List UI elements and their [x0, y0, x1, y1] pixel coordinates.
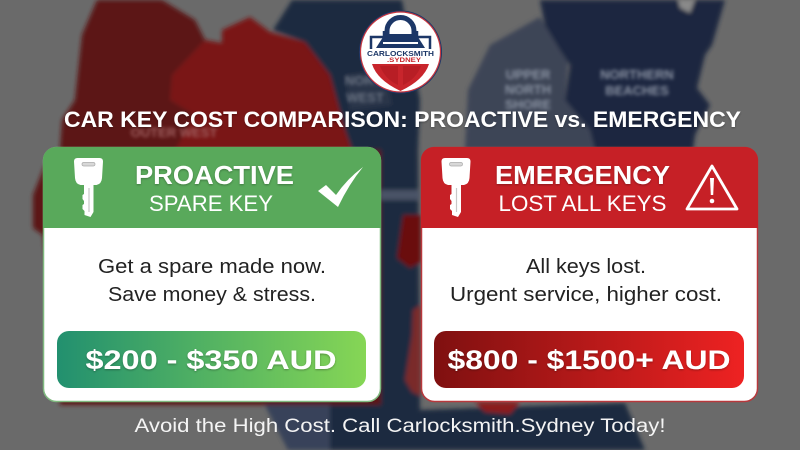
- footer call to action: Avoid the High Cost. Call Carlocksmith.Sydney Today!: [134, 416, 666, 437]
- proactive description: Save money & stress.: [108, 284, 316, 306]
- panel: emergency: [421, 147, 758, 402]
- title: CAR KEY COST COMPARISON: PROACTIVE vs. EMERGENCY: [64, 107, 741, 132]
- icon: emergency key: [442, 158, 470, 217]
- icon: proactive key: [74, 158, 103, 217]
- background map: NORTH: [505, 82, 551, 97]
- logo: [359, 10, 442, 94]
- background map: NORTH: [345, 73, 391, 88]
- background map: BEACHES: [605, 83, 669, 98]
- emergency description: Urgent service, higher cost.: [450, 284, 722, 306]
- logo wordmark: CARLOCKSMITH: [367, 49, 434, 58]
- emergency description: All keys lost.: [526, 256, 646, 278]
- proactive header: [43, 147, 381, 228]
- icon: check mark: [318, 167, 363, 207]
- background map: NORTHERN: [600, 67, 674, 82]
- emergency price: [434, 331, 744, 388]
- background map: UPPER: [506, 67, 551, 82]
- emergency header: [421, 147, 758, 228]
- proactive subheading: SPARE KEY: [149, 191, 273, 216]
- proactive description: [98, 256, 326, 306]
- background map: SHORE: [505, 97, 551, 112]
- proactive heading: PROACTIVE: [135, 162, 294, 190]
- panel: proactive: [43, 147, 381, 402]
- logo padlock and car: [371, 18, 430, 49]
- proactive price: [57, 331, 366, 388]
- icon: warning triangle: [687, 166, 737, 209]
- logo shield: [372, 64, 429, 91]
- background map: WEST: [346, 90, 384, 105]
- logo wordmark: .SYDNEY: [387, 57, 422, 64]
- logo wordmark: [367, 49, 434, 64]
- emergency price: $800 - $1500+ AUD: [448, 345, 730, 375]
- emergency description: [450, 256, 722, 306]
- proactive price: $200 - $350 AUD: [86, 345, 336, 375]
- background map: OUTER WEST: [131, 125, 217, 140]
- emergency subheading: LOST ALL KEYS: [498, 191, 666, 216]
- emergency heading: EMERGENCY: [495, 162, 670, 190]
- proactive description: Get a spare made now.: [98, 256, 326, 278]
